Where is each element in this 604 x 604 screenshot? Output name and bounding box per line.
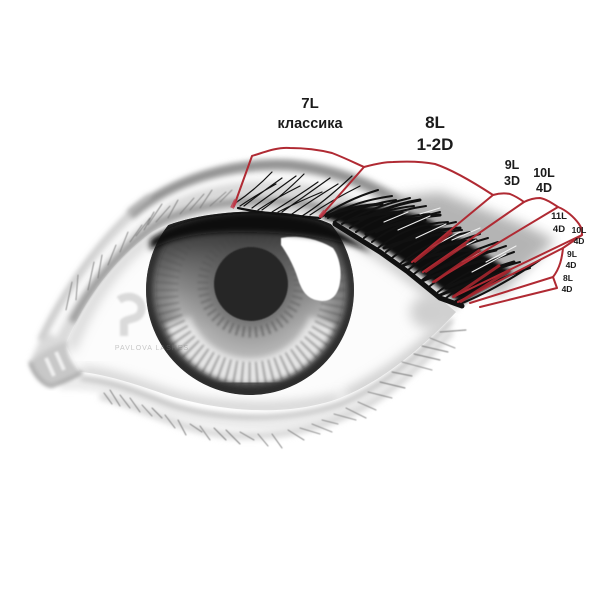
lashes: white highlights [384, 208, 516, 272]
red zones: thick roots [414, 232, 510, 302]
label: 10L 4D small: 10L [572, 225, 586, 235]
watermark [115, 292, 189, 352]
zone: 10L [433, 198, 558, 282]
label: 10L 4D: 10L [533, 166, 555, 180]
infographic: eye lash map [26, 98, 586, 449]
label: 7L классика: 7L [301, 95, 319, 112]
zone: 10L 4D [458, 235, 582, 302]
icon: tear duct [30, 340, 82, 386]
label: 10L 4D small [572, 225, 586, 246]
label: 9L 3D [504, 158, 520, 188]
upper lashes: sparse inner corner [66, 190, 232, 310]
catchlight [281, 237, 341, 301]
label: 8L 1-2D: 8L [425, 113, 445, 132]
zone: 9L 4D [470, 248, 563, 303]
lower lashes [104, 330, 466, 448]
label: 8L 1-2D: 1-2D [417, 135, 453, 154]
label: 11L 4D: 11L [551, 211, 567, 222]
lashes: upper lid black [234, 172, 540, 306]
zone: 8L 4D [480, 277, 557, 307]
watermark: PAVLOVA LASHES [115, 345, 189, 352]
label: 11L 4D: 4D [553, 224, 565, 235]
label: 9L 3D: 9L [505, 158, 520, 172]
panel: lower eyelid rim [60, 314, 456, 436]
label: 7L классика: классика [277, 116, 343, 132]
label: 10L 4D small: 4D [574, 236, 584, 246]
pupil [214, 247, 288, 321]
red zones [234, 148, 582, 307]
label: 11L 4D [551, 211, 567, 235]
label: 9L 4D small: 4D [566, 260, 576, 270]
label: 9L 4D small [566, 249, 577, 270]
label: 9L 4D small: 9L [567, 249, 577, 259]
label: 8L 4D small [562, 273, 573, 294]
label: 8L 4D small: 4D [562, 284, 572, 294]
panel: eye opening and sclera [68, 212, 456, 410]
iris [146, 212, 354, 395]
lash band: dense black base [322, 205, 512, 304]
zone: 9L [423, 193, 524, 272]
label: 8L 4D small: 8L [563, 273, 573, 283]
lash band: grey tips [370, 192, 555, 295]
zone: 11L [453, 207, 582, 297]
zone: 7L [234, 148, 364, 217]
label: 7L классика [277, 95, 343, 132]
zone: 8L [364, 162, 493, 262]
label: 9L 3D: 3D [504, 174, 520, 188]
label: 8L 1-2D [417, 113, 453, 154]
label: 10L 4D: 4D [536, 181, 552, 195]
label: 10L 4D [533, 166, 555, 195]
upper lid shadow [150, 214, 372, 254]
panel: upper eyelid fold [30, 159, 485, 362]
